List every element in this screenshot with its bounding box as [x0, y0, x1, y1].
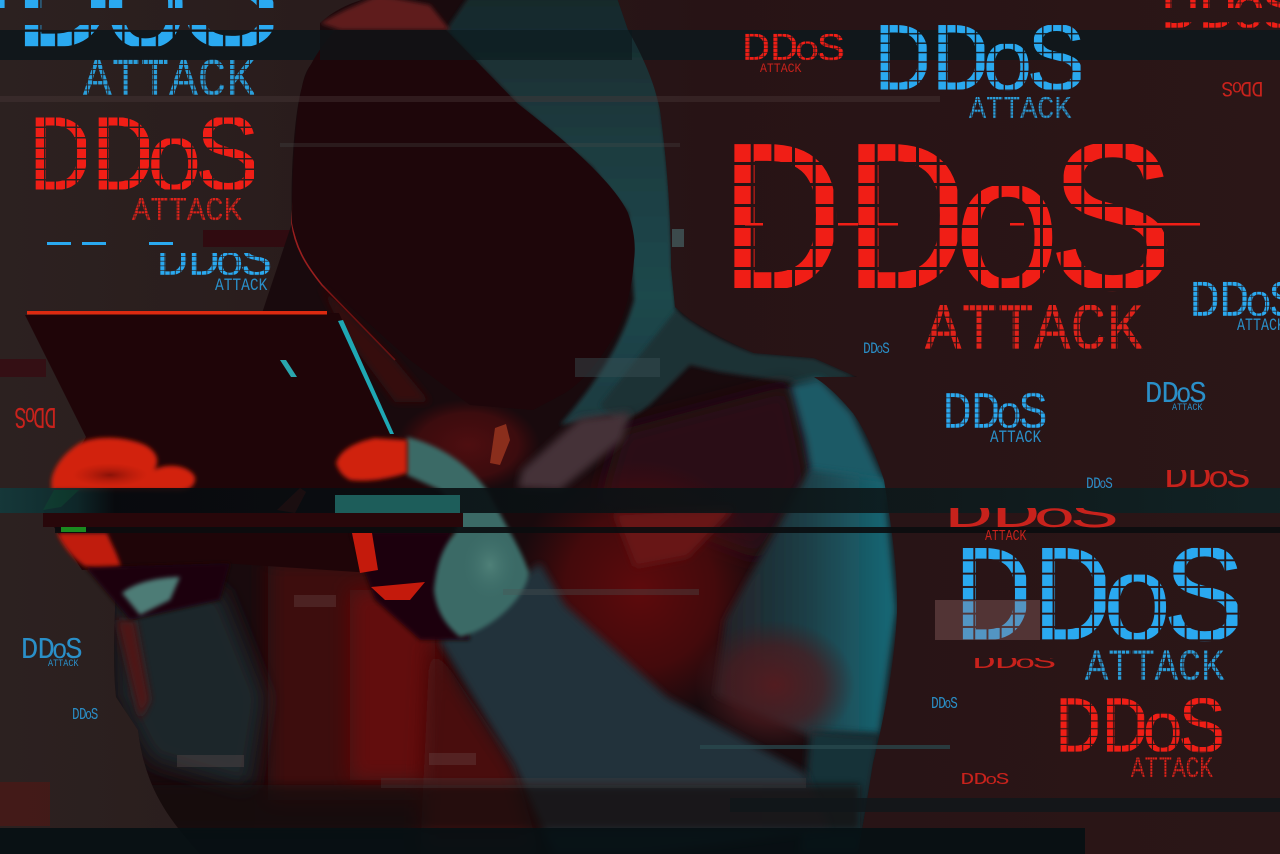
left dark smear	[0, 359, 46, 377]
tablet red top edge	[27, 311, 327, 314]
small red DDoS right	[975, 658, 1054, 668]
inverted red DDoS right: DD	[1240, 75, 1263, 99]
lower red knuckle	[371, 582, 425, 600]
red DDoS under band: S	[1070, 495, 1120, 539]
centre jacket dark red	[268, 560, 443, 800]
lower red DDoS: o	[1141, 692, 1184, 774]
tiny blue DDoS centre: DD	[863, 341, 878, 358]
red fingertip	[336, 438, 407, 481]
left red DDoS: DD	[27, 99, 156, 224]
scan streak upper	[0, 96, 940, 102]
arm red patch	[706, 628, 849, 742]
left blue glitched DDoS: o	[215, 239, 244, 288]
tiny blue DDoS right: DD	[1086, 476, 1101, 493]
fist light patch	[460, 527, 520, 603]
lower red DDoS: DD	[1054, 685, 1149, 777]
red-dark strip between bands	[43, 513, 463, 527]
top red small ATTACK: ATTACK	[760, 61, 802, 76]
large blue DDoS: S	[1163, 523, 1246, 682]
hooded figure	[114, 0, 897, 828]
mid blue ATTACK: ATTACK	[990, 428, 1041, 448]
big red DDoS: DD	[717, 106, 971, 356]
main band	[0, 488, 1280, 513]
left blue dashes	[47, 242, 173, 245]
centre jacket bright red	[350, 590, 435, 780]
top-left blue ATTACK: ATTACK	[83, 51, 256, 111]
red thumb	[277, 488, 306, 513]
left sleeve	[116, 580, 265, 790]
top red small DDoS: DD	[741, 28, 799, 72]
pocket flap	[613, 513, 734, 566]
lower hood red folds	[320, 285, 430, 402]
tiny blue DDoS lower: S	[950, 696, 958, 714]
top band tint over figure	[320, 30, 632, 60]
tiny blue DDoS lower: DD	[931, 696, 946, 714]
right blue DDoS small: o	[1176, 379, 1191, 410]
left blue ATTACK: ATTACK	[215, 275, 267, 295]
red DDoS above band	[1167, 470, 1249, 488]
red mid spot	[339, 513, 357, 527]
noise block three	[429, 753, 476, 765]
lower left blue ATTACK: ATTACK	[48, 657, 79, 669]
right blue DDoS small: DD	[1145, 376, 1179, 411]
collar	[518, 412, 630, 490]
top-left blue glitched DDoS	[0, 0, 274, 46]
tiny blue DDoS lower: o	[945, 696, 951, 713]
left blue glitched DDoS: DD	[156, 235, 221, 290]
noise block two	[177, 755, 244, 767]
hood red rim	[292, 60, 395, 360]
lower left blue DDoS: S	[65, 632, 83, 667]
tablet body	[25, 313, 500, 575]
small red DDoS right: S	[1033, 652, 1056, 674]
mid blue DDoS: S	[1018, 385, 1048, 444]
left blue glitched DDoS	[160, 253, 270, 276]
large blue ATTACK: ATTACK	[1085, 644, 1225, 694]
top blue DDoS: S	[1027, 8, 1087, 120]
wrist teal	[122, 577, 180, 615]
lower right band	[730, 798, 1280, 812]
lower fingers	[57, 533, 121, 570]
inverted red DDoS left: S	[14, 398, 26, 434]
small red DDoS right: DD	[972, 652, 1019, 674]
hood grey block	[575, 358, 660, 377]
upper fingers	[51, 438, 195, 491]
big red DDoS: S	[1048, 106, 1178, 356]
chest red	[529, 476, 751, 700]
noise block one	[294, 595, 336, 607]
top right red glitch	[1165, 0, 1280, 28]
bottom small red DDoS: DD	[960, 771, 987, 790]
zip strip red	[416, 658, 536, 828]
hood side block	[672, 229, 684, 247]
tiny blue DDoS left: DD	[72, 706, 87, 725]
right edge blue DDoS: o	[1245, 278, 1272, 330]
green glitch	[43, 490, 79, 510]
red DDoS under band	[950, 508, 1116, 528]
red ATTACK under band: ATTACK	[985, 529, 1027, 545]
inverted red DDoS left: o	[25, 400, 35, 431]
tablet	[25, 311, 500, 575]
finger shadow	[72, 463, 148, 487]
lower left blue DDoS: o	[52, 635, 67, 666]
tiny blue DDoS left: o	[85, 706, 92, 724]
right blue ATTACK small: ATTACK	[1172, 401, 1203, 413]
scan streak hood	[280, 143, 680, 147]
right hand	[277, 437, 529, 640]
top red small DDoS: o	[794, 31, 820, 71]
tablet teal edge	[338, 320, 394, 434]
top red small DDoS: S	[816, 28, 846, 72]
fist shadow	[350, 533, 470, 640]
arm teal body	[715, 470, 897, 735]
red DDoS under band: DD	[944, 495, 1041, 539]
red DDoS above band: o	[1208, 463, 1229, 496]
chest upper shade	[600, 385, 810, 560]
big red ATTACK: ATTACK	[925, 294, 1143, 369]
left sleeve red edge	[116, 620, 150, 720]
tiny blue DDoS left: S	[91, 706, 98, 725]
lower red ATTACK: ATTACK	[1131, 753, 1213, 787]
teal streak	[700, 745, 950, 749]
tiny blue DDoS right: S	[1105, 476, 1113, 493]
bottom small red DDoS: o	[985, 772, 997, 789]
bottom fade	[226, 781, 863, 828]
scan streak fist	[503, 589, 699, 595]
forearm sleeve	[437, 562, 808, 828]
hood top red patch	[320, 0, 450, 30]
tiny blue DDoS centre: S	[882, 341, 890, 358]
red DDoS under band: o	[1032, 498, 1076, 538]
tiny blue DDoS centre: o	[877, 342, 883, 357]
neck red	[404, 403, 534, 485]
bottom dark band	[0, 828, 1085, 854]
shoulder	[600, 310, 857, 425]
big DDoS glitch lines	[745, 223, 1200, 226]
left red DDoS: S	[195, 99, 261, 224]
pale glitch block	[935, 600, 1040, 640]
upper arm teal	[790, 378, 890, 500]
lower left blue DDoS: DD	[21, 632, 55, 667]
scan streak lower	[381, 778, 806, 788]
thin band	[55, 527, 1280, 533]
left red ATTACK: ATTACK	[132, 192, 242, 230]
teal smear over fist	[335, 495, 460, 513]
lower red DDoS: S	[1178, 685, 1227, 777]
left blue glitched DDoS: S	[240, 235, 273, 290]
lower palm shadow	[85, 563, 230, 620]
top dark glitch band	[0, 30, 1280, 60]
right edge blue DDoS: DD	[1189, 273, 1250, 332]
bottom-left red noise	[0, 782, 50, 826]
mid blue DDoS: DD	[942, 385, 1001, 444]
bottom small red DDoS: S	[996, 771, 1009, 790]
large blue DDoS: DD	[952, 523, 1114, 682]
large blue DDoS: o	[1100, 538, 1174, 678]
zipper	[490, 424, 510, 465]
face opening shadow	[292, 30, 635, 410]
inverted red DDoS right: o	[1232, 76, 1242, 98]
top blue DDoS: DD	[873, 8, 991, 120]
upper left dark red smear	[203, 230, 297, 247]
inverted red DDoS right: S	[1221, 75, 1233, 99]
lower red finger	[352, 533, 378, 573]
small red DDoS right: o	[1015, 654, 1036, 674]
right blue DDoS small: S	[1189, 376, 1207, 411]
arm lower	[804, 730, 879, 828]
fist teal skin	[407, 437, 529, 637]
mid blue DDoS: o	[996, 389, 1022, 442]
big red DDoS: o	[949, 128, 1065, 348]
red DDoS above band: S	[1226, 460, 1251, 498]
green strip	[61, 527, 86, 532]
inverted red DDoS left: DD	[33, 398, 56, 434]
tablet small teal mark	[280, 360, 297, 377]
hood teal side	[446, 0, 692, 425]
top blue DDoS: o	[981, 17, 1034, 117]
left hand	[43, 438, 230, 620]
red DDoS above band: DD	[1164, 460, 1212, 498]
left red DDoS: o	[145, 110, 204, 220]
tiny blue DDoS right: o	[1100, 477, 1106, 492]
top blue ATTACK: ATTACK	[969, 93, 1072, 128]
